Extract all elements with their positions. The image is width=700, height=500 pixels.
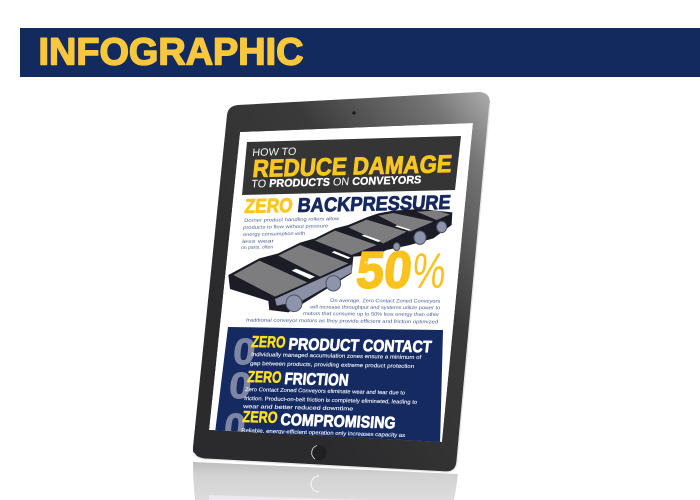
benefit: zero friction — [230, 370, 417, 410]
text block: backpressure intro — [241, 216, 340, 251]
icon: big zero: 0 — [231, 330, 258, 372]
panel: headline — [242, 136, 461, 195]
benefit: zero compromising — [225, 410, 405, 438]
text block: backpressure intro: energy consumption with — [243, 231, 306, 238]
text block: Individually managed accumulation zones ensure a minimum of — [251, 352, 422, 361]
text block — [241, 387, 417, 412]
text block: gap between products, providing extreme product protection — [250, 361, 414, 370]
statistic: 50%: 50 — [354, 242, 415, 300]
text block: friction. Product-on-belt friction is completely eliminated, leading to — [244, 396, 417, 406]
text block: wear and better reduced downtime — [241, 404, 353, 412]
infographic screen — [209, 123, 473, 448]
icon: big zero: 0 — [222, 405, 248, 448]
text block: Reliable, energy-efficient operation only increases capacity as — [241, 428, 406, 439]
tablet body — [193, 92, 490, 472]
icon: big zero: 0 — [227, 364, 254, 406]
statistic: 50% — [356, 250, 444, 290]
heading: FRICTION — [284, 369, 350, 390]
statistic: 50%: green — [364, 260, 373, 264]
heading: ZERO — [247, 368, 282, 387]
conveyor chain body — [228, 209, 452, 312]
statistic: 50%: % — [410, 243, 449, 299]
tablet mockup — [193, 92, 490, 472]
title banner — [20, 28, 700, 77]
heading: zero backpressure: ZERO — [243, 195, 294, 218]
tablet reflection — [193, 462, 458, 500]
text block: backpressure intro: Dorner product handling rollers allow — [244, 216, 340, 224]
text block: conveyor energy savings — [246, 298, 441, 325]
heading: how to: HOW TO — [252, 146, 297, 159]
benefit: zero product contact — [234, 336, 432, 369]
panel: three zero benefits — [215, 327, 443, 448]
conveyor side frame — [275, 264, 352, 306]
heading: PRODUCT CONTACT — [288, 335, 433, 356]
heading: zero backpressure — [244, 194, 451, 214]
heading: reduce damage: REDUCE DAMAGE — [251, 151, 453, 183]
conveyor illustration — [228, 209, 452, 312]
conveyor plates — [233, 211, 450, 297]
rollers — [286, 221, 447, 312]
text block: conveyor energy savings: On average, Zero Contact Zoned Conveyors — [330, 298, 441, 305]
text block: backpressure intro: products to flow without pressure — [243, 223, 329, 231]
title: INFOGRAPHIC — [38, 32, 304, 74]
text block: conveyor energy savings: will increase throughput and systems utilize power to — [310, 305, 441, 311]
icon: home button — [311, 445, 327, 460]
heading: zero backpressure: BACKPRESSURE — [296, 192, 452, 217]
heading: ZERO — [251, 333, 286, 351]
text block: Zero Contact Zoned Conveyors eliminate wear and tear due to — [245, 387, 405, 397]
text block — [250, 352, 422, 370]
tablet edge highlight — [194, 103, 490, 472]
text block: backpressure intro: less wear — [242, 238, 275, 245]
text block: conveyor energy savings: traditional conveyor motors as they provide efficient and friction optimized — [246, 318, 439, 325]
icon: camera — [352, 111, 356, 115]
text block: backpressure intro: on parts, often — [241, 244, 274, 251]
plate slots — [292, 225, 411, 279]
text block: conveyor energy savings: motors that consume up to 50% less energy than other — [303, 311, 440, 318]
heading: COMPROMISING — [280, 410, 397, 432]
heading: ZERO — [242, 408, 278, 427]
heading: to products on conveyors: TO PRODUCTS ON CONVEYORS — [251, 174, 422, 190]
